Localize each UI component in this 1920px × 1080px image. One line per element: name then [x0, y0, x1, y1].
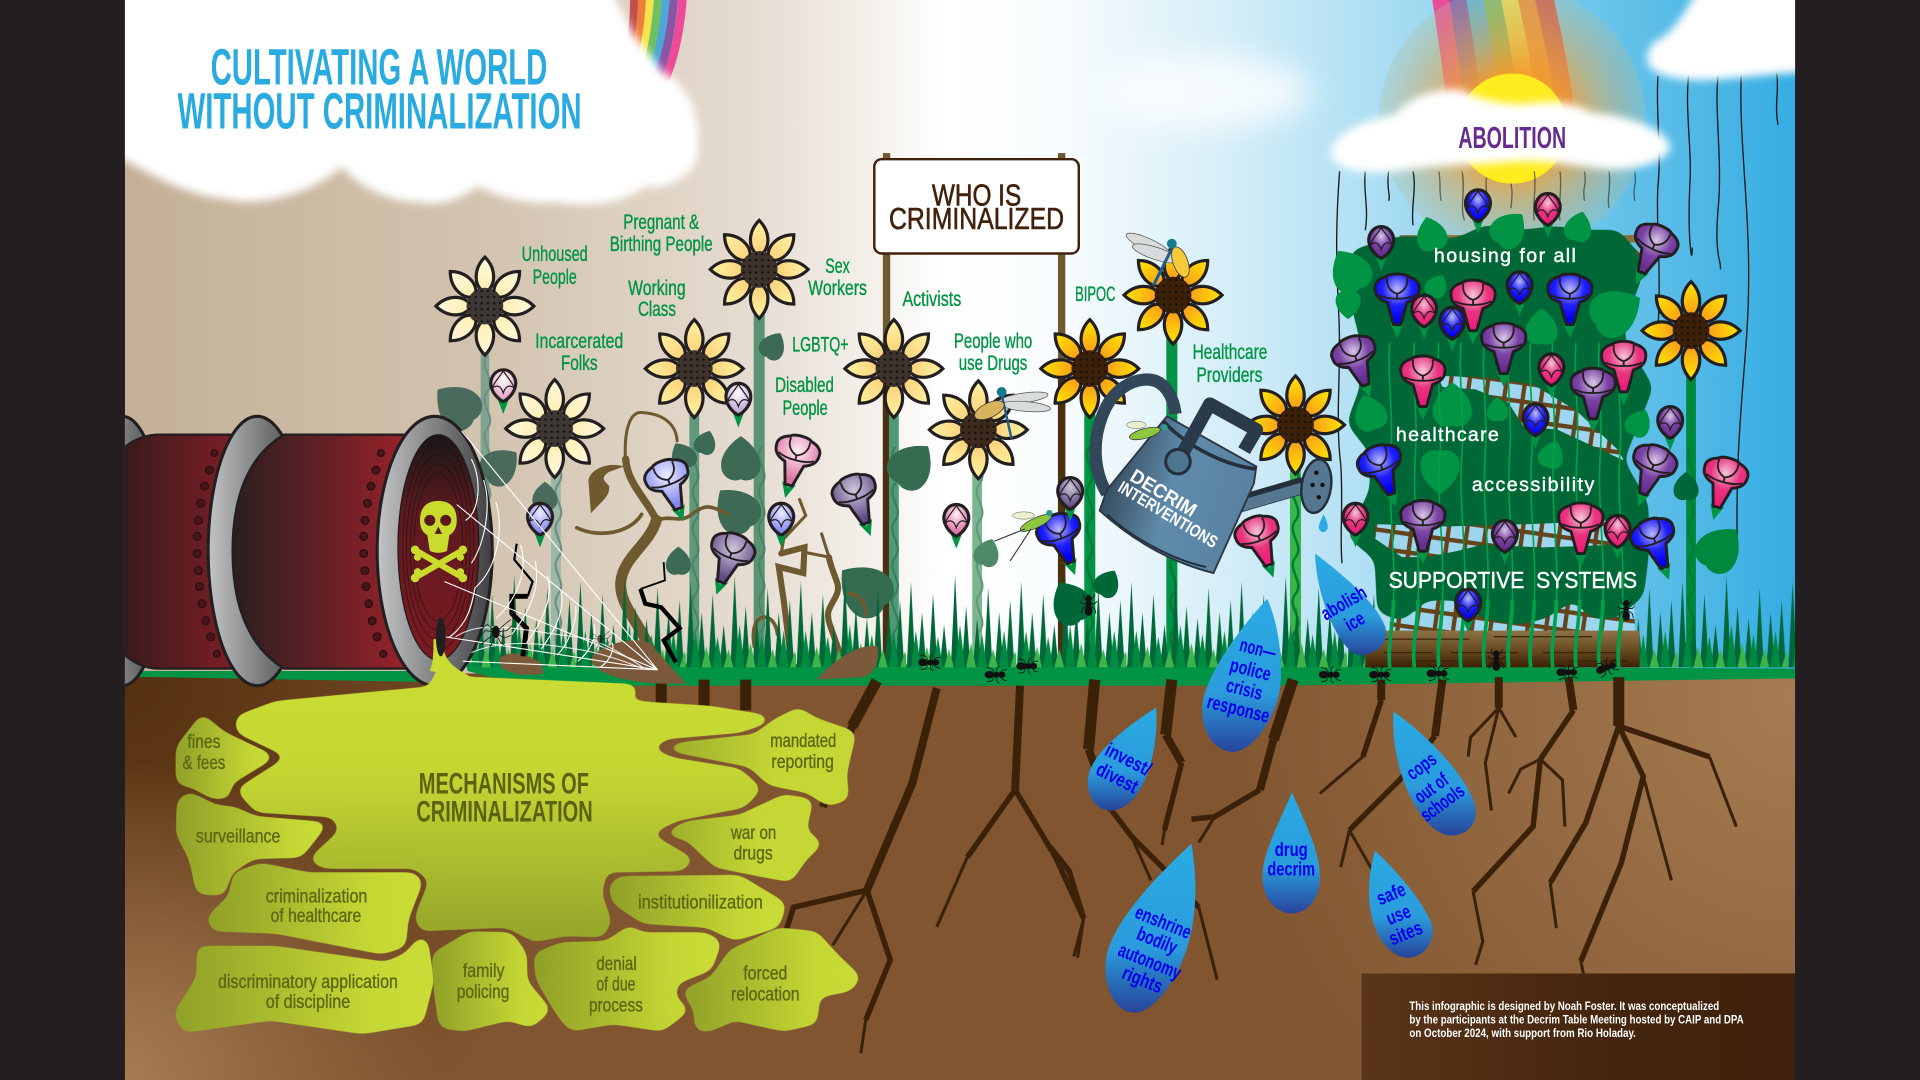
mechanisms heading [416, 767, 593, 829]
trellis gaps in mass [1375, 376, 1624, 557]
sunflower: unhoused people [436, 257, 534, 355]
grass [471, 576, 1795, 669]
who-is-criminalized labels: Incarcerated [535, 330, 623, 353]
drop: enshrine bodily autonomy rights: enshrine [1132, 901, 1195, 944]
drop: abolish ice: abolish [1317, 582, 1371, 625]
faint cloud [1102, 55, 1310, 129]
credit box: by the participants at the Decrim Table Meeting hosted by CAIP and DPA [1409, 1013, 1744, 1027]
pipe opening inside [398, 435, 479, 660]
watering can: decrim interventions [1096, 380, 1335, 573]
can handle [1096, 380, 1176, 493]
sign: who is criminalized: WHO IS [932, 179, 1021, 213]
mechanism labels: process [589, 994, 643, 1016]
drop: enshrine bodily autonomy rights [1105, 844, 1195, 1013]
skull and crossbones [411, 501, 467, 582]
who-is-criminalized labels: Working [628, 277, 686, 300]
slime sub-blobs [174, 708, 861, 1033]
sunflower: bipoc [1041, 320, 1139, 418]
rivets right [360, 450, 387, 657]
log planter [1365, 631, 1640, 667]
mechanism labels: fines [187, 731, 221, 753]
drop: cops out of schools [1393, 711, 1476, 835]
can knob [1166, 449, 1190, 474]
top-right cloud [1647, 0, 1818, 80]
sunflower: abolition side [1642, 282, 1740, 380]
title [178, 48, 580, 129]
blob: forced relocation [682, 928, 861, 1031]
blob: discriminatory application [174, 937, 433, 1033]
mechanism labels: & fees [182, 752, 225, 774]
drop: enshrine bodily autonomy rights: bodily [1134, 923, 1180, 959]
drop: safe use sites: sites [1386, 917, 1426, 950]
mechanism labels: drugs [733, 843, 773, 865]
mechanisms heading: CRIMINALIZATION [416, 796, 593, 829]
pipe opening rim [377, 416, 492, 686]
drop: abolish ice: ice [1341, 607, 1369, 636]
who-is-criminalized labels: Pregnant & [623, 211, 699, 234]
morning glories among left flowers [491, 370, 1294, 602]
can label: INTERVENTIONS [1115, 477, 1222, 552]
sunflower: healthcare providers [1247, 376, 1344, 474]
drop: non-police crisis response: response [1205, 691, 1272, 728]
garden labels: housing for all [1434, 245, 1576, 267]
drop: cops out of schools: schools [1416, 780, 1469, 827]
flower stems and vines [485, 312, 1694, 667]
sign posts [883, 153, 1065, 661]
sunflower: people who use drugs [929, 381, 1027, 479]
blob: surveillance [176, 792, 328, 895]
who-is-criminalized labels: BIPOC [1075, 283, 1116, 306]
who-is-criminalized labels: Birthing People [610, 233, 713, 256]
drop: non-police crisis response: crisis [1224, 675, 1265, 705]
crack lightning [512, 544, 680, 662]
pipe drip [436, 617, 446, 656]
right rainbow [1441, 0, 1566, 122]
mechanism labels: mandated [770, 730, 836, 752]
blob: denial of due process [534, 926, 721, 1031]
water drop [1319, 514, 1328, 532]
pipe ring left [81, 416, 164, 686]
who-is-criminalized labels: Class [638, 298, 676, 321]
who-is-criminalized labels: Unhoused [522, 243, 588, 266]
can label: DECRIM [1126, 465, 1200, 522]
mechanism labels: relocation [731, 983, 800, 1005]
slime stream [430, 639, 471, 677]
drop: non-police crisis response [1202, 599, 1281, 752]
garden labels: SUPPORTIVE SYSTEMS [1389, 567, 1637, 593]
green turf band [125, 662, 1795, 686]
rivets left [193, 450, 220, 657]
garden labels: accessibility [1472, 474, 1594, 496]
pipe segment left [125, 435, 239, 669]
leaves on stems [424, 327, 1753, 631]
spout rose [1298, 457, 1335, 515]
title: CULTIVATING A WORLD [211, 37, 547, 95]
mechanism labels: denial [596, 953, 637, 975]
blob: criminalization of healthcare [207, 863, 422, 954]
pipe inner rings [403, 444, 474, 650]
sign: who is criminalized [874, 159, 1079, 253]
left rainbow [618, 0, 683, 83]
who-is-criminalized labels [522, 211, 1267, 420]
dragonflies and grasshoppers [972, 229, 1193, 561]
mechanisms heading: MECHANISMS OF [419, 767, 589, 800]
pipe ring middle [208, 416, 306, 686]
mechanism labels: discriminatory application [218, 971, 398, 993]
who-is-criminalized labels: use Drugs [959, 352, 1027, 375]
sun [1466, 74, 1563, 184]
mechanism labels: war on [730, 822, 776, 844]
sunflower: pregnant people [710, 220, 808, 318]
ants [919, 594, 1635, 683]
pipe segment right [233, 435, 422, 669]
panel: supportive systems green mass [1344, 225, 1653, 624]
drop: safe use sites [1369, 851, 1433, 958]
who-is-criminalized labels: LGBTQ+ [792, 333, 849, 356]
drop: enshrine bodily autonomy rights: rights [1119, 962, 1166, 998]
drop: invest/divest: invest/ [1101, 739, 1155, 781]
drop: cops out of schools: out of [1410, 769, 1453, 808]
spiderweb [444, 431, 658, 670]
title: WITHOUT CRIMINALIZATION [178, 82, 582, 140]
mechanism labels: of healthcare [271, 905, 361, 927]
garden vines [1389, 343, 1623, 667]
withered plants [577, 412, 866, 660]
trellis lattice behind garden [1385, 235, 1638, 632]
grasshopper on can [1127, 421, 1168, 442]
spiders [480, 620, 611, 650]
sunflower: incarcerated folks [506, 380, 604, 478]
slime main shape [236, 661, 771, 942]
drop: cops out of schools: cops [1402, 748, 1441, 785]
who-is-criminalized labels: Workers [808, 277, 867, 300]
top-left cloud [104, 0, 698, 204]
who-is-criminalized labels: Providers [1196, 364, 1262, 387]
credit box: This infographic is designed by Noah Foster. It was conceptualized [1409, 999, 1719, 1013]
who-is-criminalized labels: Disabled [775, 374, 834, 397]
roots [661, 677, 1736, 1053]
can body [1100, 416, 1256, 573]
blob: war on drugs [662, 795, 823, 882]
who-is-criminalized labels: People [782, 397, 828, 420]
abolition cloud [1331, 89, 1670, 172]
credit box [1362, 973, 1795, 1080]
sign: who is criminalized: CRIMINALIZED [889, 202, 1064, 236]
sunflower: lgbtq [845, 320, 943, 418]
drop: drug decrim: drug [1275, 839, 1308, 861]
soil ground [125, 673, 1795, 1080]
sun halo [1379, 0, 1646, 253]
can lid band [1163, 421, 1256, 469]
drop: safe use sites: safe [1373, 879, 1409, 910]
credit box: on October 2024, with support from Rio Holaday. [1409, 1026, 1636, 1040]
dragonfly on middle sunflower [972, 387, 1051, 438]
water drops: interventions [1088, 553, 1476, 1013]
sky gradient [125, 0, 1795, 686]
who-is-criminalized labels: Healthcare [1193, 341, 1267, 364]
can label [1115, 465, 1222, 552]
drop: abolish ice [1315, 553, 1386, 655]
sunflower: working class [645, 320, 743, 418]
mechanism labels: of discipline [266, 991, 350, 1013]
drop: drug decrim: decrim [1267, 859, 1315, 881]
blob: family policing [432, 932, 551, 1031]
can top handle [1178, 404, 1256, 462]
rain lines [1337, 73, 1778, 563]
can spout [1200, 486, 1300, 516]
blob: fines & fees [176, 714, 276, 798]
sunflower: top bipoc [1124, 246, 1222, 344]
soil mounds [500, 640, 878, 684]
drop: non-police crisis response: police [1228, 654, 1273, 686]
mechanism labels: policing [457, 981, 509, 1003]
mechanism labels [182, 730, 836, 1016]
mechanism labels: surveillance [196, 825, 280, 847]
blob: mandated reporting [662, 708, 856, 806]
abolition label: ABOLITION [1458, 121, 1566, 155]
garden leaves [1321, 203, 1657, 494]
mechanism labels: of due [596, 974, 636, 996]
sunflowers [436, 220, 1740, 479]
garden labels: healthcare [1396, 424, 1499, 446]
who-is-criminalized labels: Activists [902, 288, 961, 311]
garden morning glories [1327, 190, 1751, 633]
drop: invest/divest [1088, 708, 1156, 811]
who-is-criminalized labels: Sex [825, 255, 850, 278]
drop: non-police crisis response: non— [1237, 634, 1279, 664]
drop: enshrine bodily autonomy rights: autonomy [1115, 939, 1184, 984]
drop: invest/divest: divest [1092, 759, 1142, 798]
who-is-criminalized labels: People who [954, 330, 1032, 353]
who-is-criminalized labels: Folks [561, 352, 598, 375]
grasshopper near blue flower [994, 510, 1054, 561]
who-is-criminalized labels: People [533, 266, 577, 289]
slime main pool [236, 617, 771, 942]
mechanism labels: institutionilization [638, 892, 763, 914]
pipe [81, 416, 492, 686]
mechanism labels: reporting [771, 751, 834, 773]
garden labels [1389, 245, 1637, 593]
mechanism labels: family [463, 960, 505, 982]
blob: institutionilization [609, 876, 786, 940]
drop: safe use sites: use [1383, 900, 1414, 930]
drop: drug decrim [1262, 792, 1320, 913]
mechanism labels: criminalization [266, 885, 367, 907]
mechanism labels: forced [743, 963, 787, 985]
dragonfly on top sunflower [1126, 232, 1190, 286]
